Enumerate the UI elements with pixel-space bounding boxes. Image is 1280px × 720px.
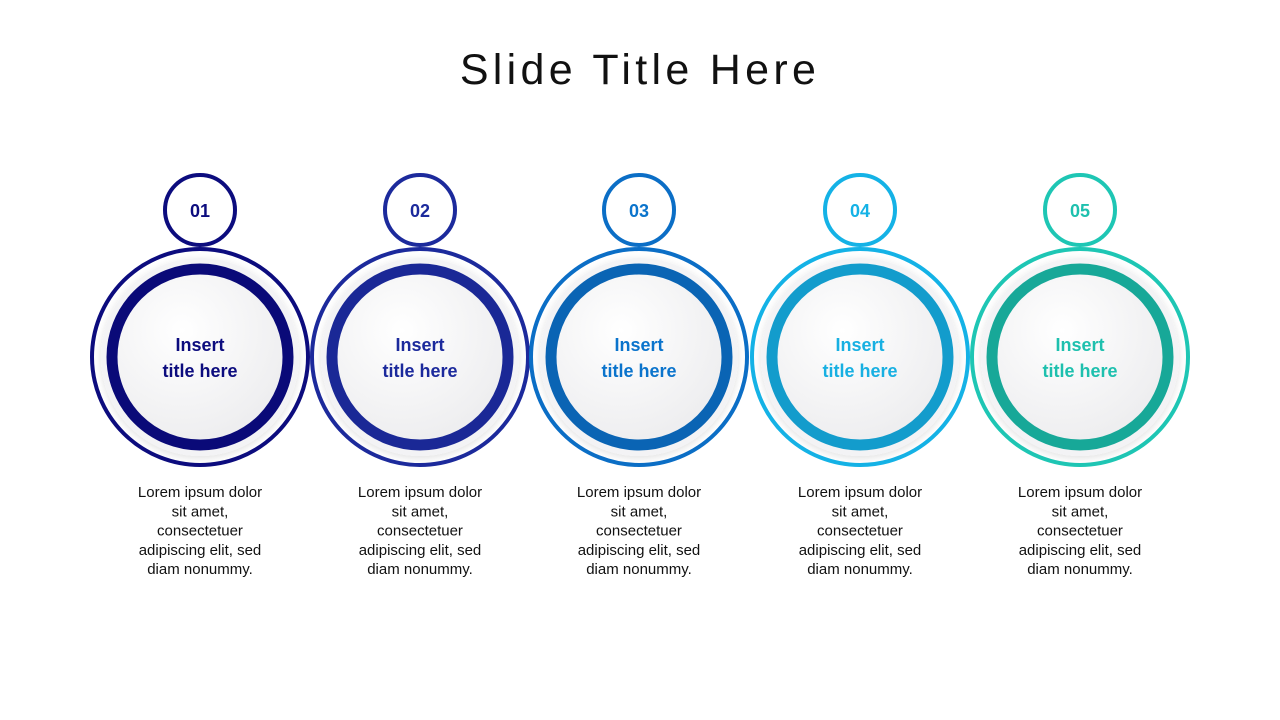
description 3: diam nonummy. (586, 561, 692, 578)
badge 03 (604, 175, 674, 245)
description 5: adipiscing elit, sed (1019, 542, 1141, 559)
description 3: consectetuer (596, 523, 682, 540)
description 1: adipiscing elit, sed (139, 542, 261, 559)
description 1: consectetuer (157, 523, 243, 540)
step title 3: Insert (614, 335, 664, 355)
description 4: consectetuer (817, 523, 903, 540)
step 1 (92, 175, 308, 578)
description 5: Lorem ipsum dolor (1018, 484, 1142, 501)
description 3: sit amet, (611, 503, 667, 520)
description 1: sit amet, (172, 503, 228, 520)
badge 05 (1045, 175, 1115, 245)
step title 1: title here (162, 361, 238, 381)
badge 01 (165, 175, 235, 245)
badge 02: 02 (410, 201, 430, 221)
step title 4: Insert (835, 335, 885, 355)
description 5: consectetuer (1037, 523, 1123, 540)
description 2: adipiscing elit, sed (359, 542, 481, 559)
title: Slide Title Here (460, 46, 820, 94)
description 2: Lorem ipsum dolor (358, 484, 482, 501)
description 4: diam nonummy. (807, 561, 913, 578)
description 2: diam nonummy. (367, 561, 473, 578)
description 2: sit amet, (392, 503, 448, 520)
step title 3: title here (601, 361, 677, 381)
step title 4: title here (822, 361, 898, 381)
step 3 (531, 175, 747, 578)
step title 5: Insert (1055, 335, 1105, 355)
badge 05: 05 (1070, 201, 1090, 221)
step 4 (752, 175, 968, 578)
description 3: Lorem ipsum dolor (577, 484, 701, 501)
step title 5: title here (1042, 361, 1118, 381)
badge 04: 04 (850, 201, 870, 221)
description 2: consectetuer (377, 523, 463, 540)
description 4: adipiscing elit, sed (799, 542, 921, 559)
description 5: diam nonummy. (1027, 561, 1133, 578)
description 3: adipiscing elit, sed (578, 542, 700, 559)
badge 02 (385, 175, 455, 245)
description 5: sit amet, (1052, 503, 1108, 520)
badge 04 (825, 175, 895, 245)
description 4: Lorem ipsum dolor (798, 484, 922, 501)
description 1: Lorem ipsum dolor (138, 484, 262, 501)
step 5 (972, 175, 1188, 578)
step title 2: title here (382, 361, 458, 381)
step 2 (312, 175, 528, 578)
description 4: sit amet, (832, 503, 888, 520)
step title 1: Insert (175, 335, 225, 355)
badge 03: 03 (629, 201, 649, 221)
badge 01: 01 (190, 201, 210, 221)
step title 2: Insert (395, 335, 445, 355)
description 1: diam nonummy. (147, 561, 253, 578)
